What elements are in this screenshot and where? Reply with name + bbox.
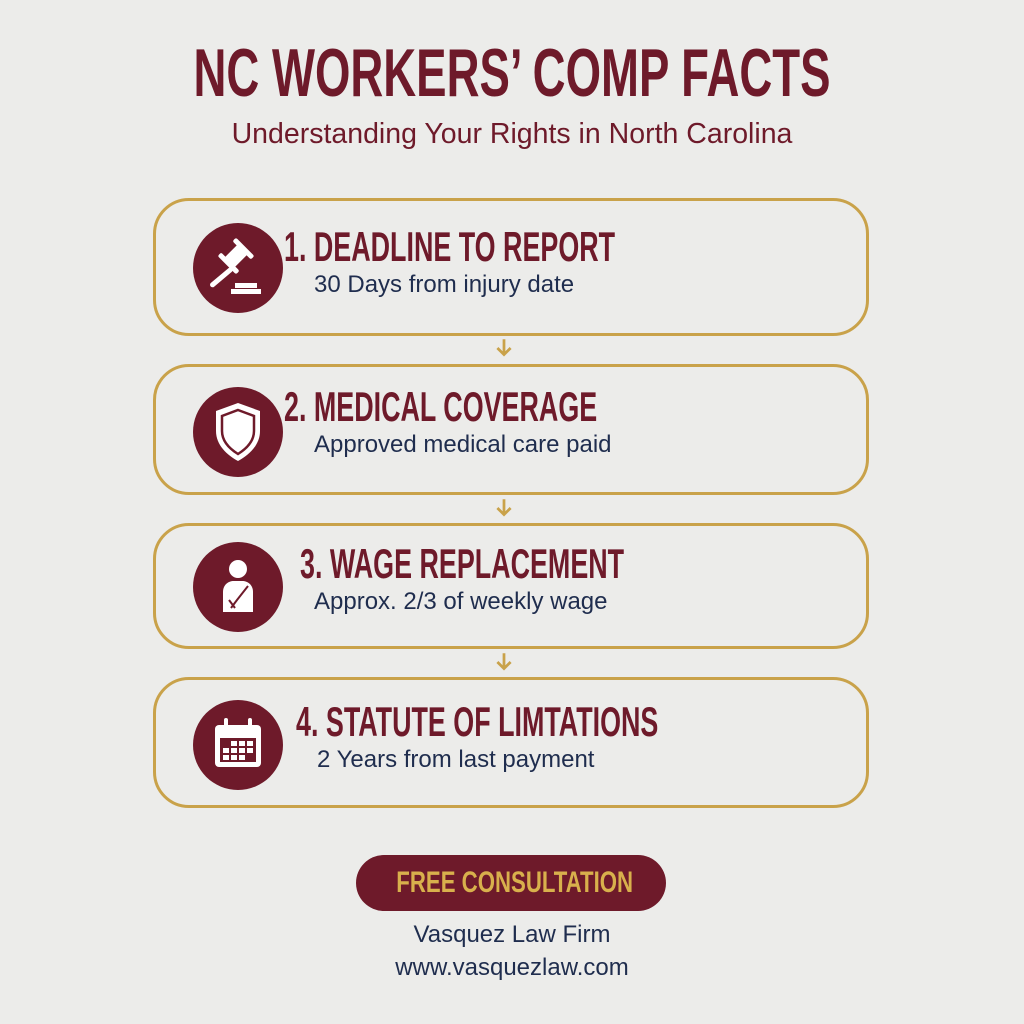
footer text: www.vasquezlaw.com (395, 954, 629, 981)
button label: FREE CONSULTATION (396, 866, 633, 899)
text: 2 Years from last payment (317, 746, 594, 773)
title: NC WORKERS’ COMP FACTS (193, 35, 831, 111)
footer text (395, 921, 629, 981)
heading: 1. DEADLINE TO REPORT (284, 223, 615, 270)
icon: calendar (193, 700, 283, 790)
arrow (496, 653, 512, 670)
text: Approx. 2/3 of weekly wage (314, 588, 608, 615)
panel: medical (153, 364, 869, 495)
icon: shield (193, 387, 283, 477)
icon: injured person (193, 542, 283, 632)
panel: wage (153, 523, 869, 649)
arrow (496, 339, 512, 356)
footer text: Vasquez Law Firm (414, 921, 610, 948)
panel: statute (153, 677, 869, 808)
heading: 4. STATUTE OF LIMTATIONS (296, 698, 658, 745)
text: Approved medical care paid (314, 431, 612, 458)
button: free consultation (356, 855, 666, 911)
subtitle: Understanding Your Rights in North Carolina (232, 118, 792, 150)
text: 30 Days from injury date (314, 271, 574, 298)
heading: 3. WAGE REPLACEMENT (300, 540, 624, 587)
panel: deadline (153, 198, 869, 336)
arrow (496, 499, 512, 516)
heading: 2. MEDICAL COVERAGE (284, 383, 597, 430)
icon: gavel (193, 223, 283, 313)
